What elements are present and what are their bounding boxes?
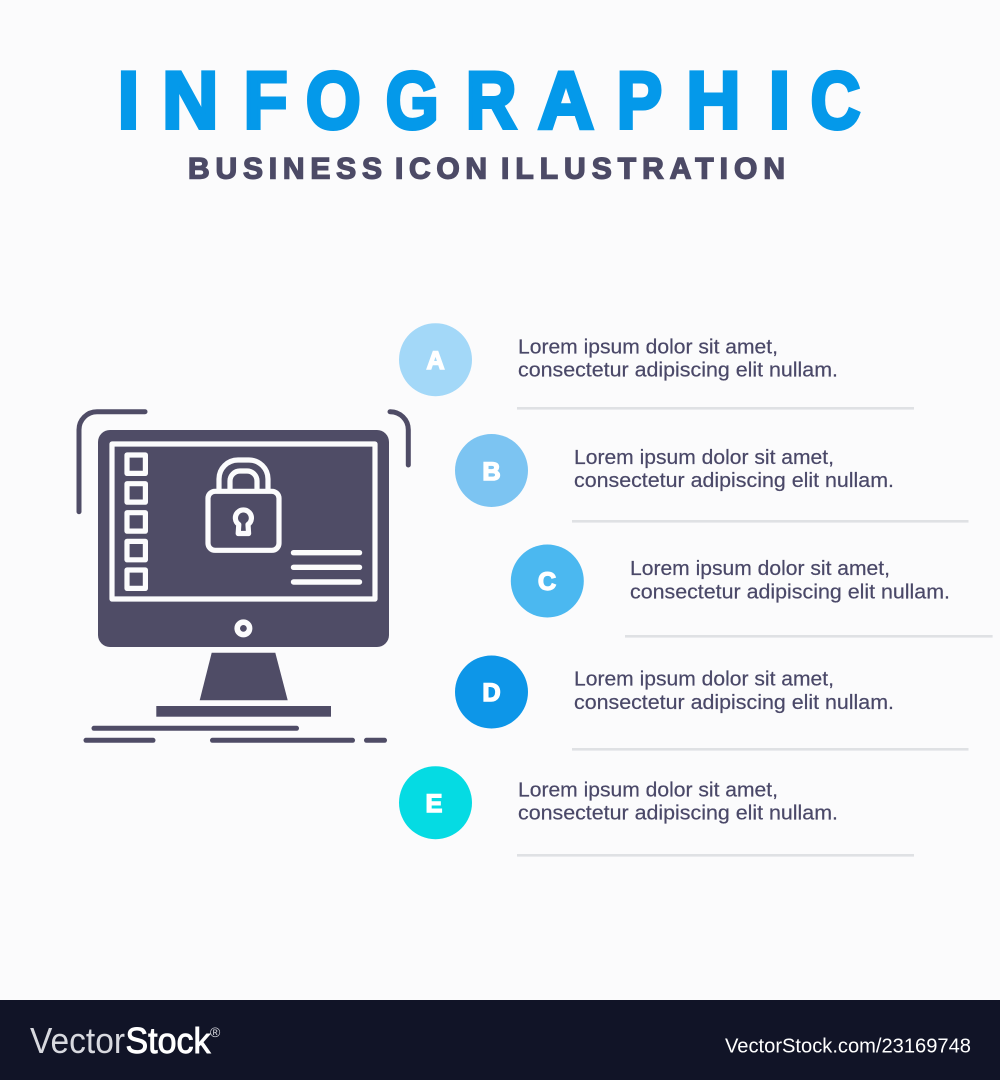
subtitle: ILLUSTRATION [501,152,785,186]
footer logo: ® [210,1024,221,1040]
text D: Lorem ipsum dolor sit amet, [574,668,834,691]
footer bar [0,1000,1000,1080]
padlock [208,460,279,550]
title: H [686,56,740,146]
monitor body [98,430,389,647]
footer logo: Vector [30,1020,125,1061]
text E: consectetur adipiscing elit nullam. [518,802,838,824]
sidebar checkboxes [127,455,145,588]
footer logo: Stock [126,1020,211,1061]
letter B: B [482,458,501,486]
title: F [244,56,288,146]
text B: consectetur adipiscing elit nullam. [574,469,894,492]
text A: consectetur adipiscing elit nullam. [518,359,838,382]
monitor screen outline [112,444,375,599]
title: I [769,56,790,146]
text B: Lorem ipsum dolor sit amet, [574,446,834,469]
divider B [572,520,968,523]
text A: Lorem ipsum dolor sit amet, [518,335,778,358]
text D: consectetur adipiscing elit nullam. [574,691,894,714]
title: A [538,56,594,146]
badge A [399,323,472,396]
badge B [455,434,528,507]
badge C [511,544,584,618]
divider D [572,748,968,751]
divider E [517,854,914,857]
power button [237,622,250,635]
left corner bracket [79,412,145,512]
divider A [517,407,914,410]
monitor base [156,706,331,717]
title: N [162,56,218,146]
title: P [617,56,662,146]
letter E: E [426,790,442,818]
letter A: A [426,347,445,375]
title: C [811,56,860,146]
item D [455,656,968,751]
item A [399,323,914,410]
badge E [399,766,472,839]
item C [511,544,993,638]
item B [455,434,968,523]
badge D [455,656,528,728]
divider C [625,635,993,638]
letter C: C [538,568,556,596]
item E [399,766,914,857]
title: O [306,56,361,146]
text C: consectetur adipiscing elit nullam. [630,580,950,603]
footer image id: VectorStock.com/23169748 [725,1036,971,1058]
monitor stand [200,653,288,700]
title: R [466,56,517,146]
subtitle: ICON [395,152,487,186]
letter D: D [482,679,501,707]
ground lines [86,728,384,740]
text lines on screen [294,553,360,582]
text E: Lorem ipsum dolor sit amet, [518,778,778,801]
text C: Lorem ipsum dolor sit amet, [630,557,890,580]
subtitle: BUSINESS [188,152,382,186]
title: I [118,56,139,146]
right corner bracket [390,412,408,465]
title: G [386,56,439,146]
icon: computer monitor with padlock [79,412,408,740]
